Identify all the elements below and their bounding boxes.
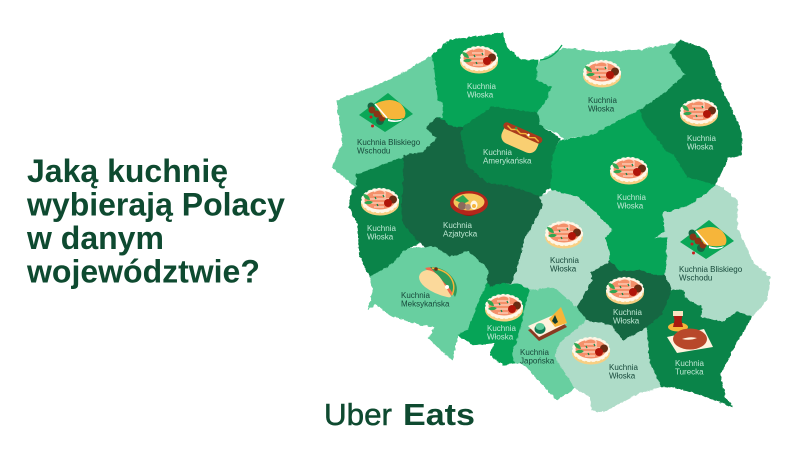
hel peninsula xyxy=(540,45,562,60)
label: podlaskie: Włoska xyxy=(687,142,714,152)
label: lubelskie xyxy=(679,220,743,282)
label: podlaskie: Kuchnia xyxy=(687,134,716,143)
title: Jaką kuchnię xyxy=(27,153,228,189)
icon: pasta xyxy=(610,158,648,184)
region: pomorskie xyxy=(432,33,552,127)
label: wielkopolskie: Kuchnia xyxy=(443,221,472,230)
label: lodzkie xyxy=(545,222,583,274)
label: warminsko-mazurskie xyxy=(583,60,621,114)
region: wielkopolskie xyxy=(402,117,543,287)
label: dolnoslaskie xyxy=(401,267,457,308)
label: malopolskie: Kuchnia xyxy=(609,363,638,372)
label: mazowieckie: Kuchnia xyxy=(617,193,646,202)
region: malopolskie xyxy=(555,320,662,412)
label: pomorskie: Kuchnia xyxy=(467,82,496,91)
label: dolnoslaskie: Kuchnia xyxy=(401,291,430,300)
label: lodzkie: Włoska xyxy=(550,264,577,274)
icon: pasta xyxy=(572,338,610,364)
label: swietokrzyskie xyxy=(606,278,644,326)
label: slaskie xyxy=(520,307,567,366)
label: pomorskie: Włoska xyxy=(467,90,494,100)
label: lubuskie: Włoska xyxy=(367,232,394,242)
label: zachodniopomorskie xyxy=(357,93,421,156)
region: dolnoslaskie xyxy=(368,247,488,360)
label: lubelskie: Wschodu xyxy=(679,274,712,282)
label: lodzkie: Kuchnia xyxy=(550,256,579,265)
region: swietokrzyskie xyxy=(577,262,672,340)
label: swietokrzyskie: Włoska xyxy=(613,316,640,326)
label: wielkopolskie: Azjatycka xyxy=(443,230,478,238)
label: malopolskie: Włoska xyxy=(609,372,636,380)
icon: pasta xyxy=(680,100,718,126)
label: mazowieckie xyxy=(610,158,648,210)
label: lubelskie: Kuchnia Bliskiego xyxy=(679,265,742,274)
map of Poland xyxy=(332,33,770,412)
label: lubuskie: Kuchnia xyxy=(367,224,396,233)
label: opolskie: Kuchnia xyxy=(487,324,516,333)
label: kujawsko-pomorskie: Amerykańska xyxy=(483,156,532,166)
region: zachodniopomorskie xyxy=(332,55,443,188)
label: podlaskie xyxy=(680,100,718,152)
icon: pasta xyxy=(460,46,498,74)
label: zachodniopomorskie: Kuchnia Bliskiego xyxy=(357,138,420,147)
icon: pasta xyxy=(545,222,583,248)
label: kujawsko-pomorskie xyxy=(483,121,543,166)
region: slaskie xyxy=(512,287,587,400)
label: podkarpackie: Kuchnia xyxy=(675,359,704,368)
label: lubuskie xyxy=(361,188,399,242)
label: warminsko-mazurskie: Włoska xyxy=(588,104,615,114)
label: slaskie: Kuchnia xyxy=(520,348,549,357)
region: podkarpackie xyxy=(647,290,752,407)
icon: taco xyxy=(419,267,457,297)
icon: pasta xyxy=(606,278,644,304)
label: dolnoslaskie: Meksykańska xyxy=(401,300,450,308)
label: podkarpackie xyxy=(667,311,713,376)
title: województwie? xyxy=(26,254,260,290)
label: warminsko-mazurskie: Kuchnia xyxy=(588,96,617,105)
logo: Uber Eats: Eats xyxy=(403,398,475,432)
region: opolskie xyxy=(458,283,530,365)
icon: kebab xyxy=(359,93,413,132)
logo: Uber Eats: Uber xyxy=(324,398,392,432)
region: mazowieckie xyxy=(550,110,716,275)
region: kujawsko-pomorskie xyxy=(460,107,560,197)
icon: tea and simit xyxy=(667,311,713,353)
icon: ramen bowl xyxy=(450,191,488,216)
label: slaskie: Japońska xyxy=(520,356,555,366)
icon: pasta xyxy=(583,60,621,88)
label: swietokrzyskie: Kuchnia xyxy=(613,308,642,317)
region: podlaskie xyxy=(640,40,742,185)
icon: pasta xyxy=(485,294,523,322)
label: opolskie: Włoska xyxy=(487,332,514,342)
icon: pasta xyxy=(361,188,399,216)
icon: hot dog xyxy=(497,121,543,157)
label: kujawsko-pomorskie: Kuchnia xyxy=(483,148,512,157)
icon: kebab xyxy=(680,220,734,259)
label: mazowieckie: Włoska xyxy=(617,202,644,210)
region: lubuskie xyxy=(349,155,420,277)
label: zachodniopomorskie: Wschodu xyxy=(357,146,390,156)
title: wybierają Polacy xyxy=(26,186,285,222)
label: malopolskie xyxy=(572,338,638,380)
label: wielkopolskie xyxy=(443,191,488,238)
label: opolskie xyxy=(485,294,523,342)
logo: Uber Eats xyxy=(324,398,475,432)
title: w danym xyxy=(26,220,164,256)
icon: sushi xyxy=(528,307,567,341)
region: warminsko-mazurskie xyxy=(537,42,685,140)
region: lubelskie xyxy=(655,185,770,322)
region: lodzkie xyxy=(512,190,612,307)
label: podkarpackie: Turecka xyxy=(675,368,704,376)
label: pomorskie xyxy=(460,46,498,100)
